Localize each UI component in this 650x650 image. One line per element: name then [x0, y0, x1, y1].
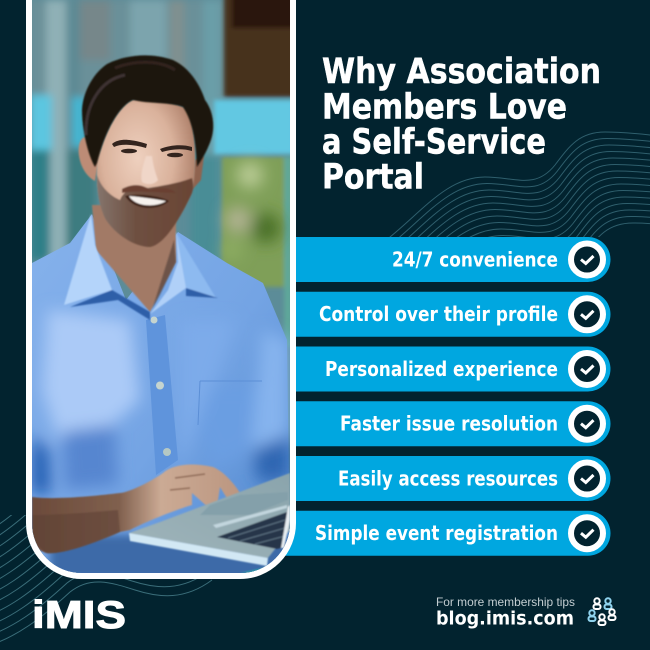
shirt placket and pocket: [146, 315, 178, 475]
benefit bar: simple event registration: Simple event registration: [315, 521, 558, 545]
benefit bar: personalized experience: [296, 346, 610, 392]
benefit bar: simple event registration: [270, 511, 610, 556]
beard: [97, 175, 193, 247]
man: forearm and hand: [32, 465, 240, 553]
man: hair: [82, 55, 213, 167]
footer call to action: [436, 595, 575, 630]
benefit bar: control over their profile: Control over their profile: [319, 302, 558, 326]
benefit bar: faster issue resolution: Faster issue resolution: [340, 412, 558, 436]
decorative wave lines: top right: [390, 132, 650, 237]
title: a Self-Service: [322, 122, 546, 162]
man: face: [97, 99, 195, 247]
photo: smiling man with laptop in white rounded frame: [29, 0, 299, 580]
benefit bar: easily access resources: [296, 456, 610, 501]
decorative wave lines: bottom left: [0, 515, 212, 642]
title: Why Association: [322, 52, 601, 92]
man: shirt: [32, 214, 290, 580]
man: ears: [79, 137, 204, 190]
man: shirt collar: [64, 214, 218, 320]
footer url: blog.imis.com: [436, 608, 574, 630]
footer tagline: For more membership tips: [436, 595, 575, 609]
title: Members Love: [322, 88, 567, 128]
logo: iMIS: iMIS: [32, 594, 126, 637]
icon: group of people: [588, 598, 616, 625]
benefit bar: control over their profile: [296, 292, 610, 337]
benefit bar: faster issue resolution: [296, 401, 610, 446]
benefit bar: personalized experience: Personalized experience: [325, 357, 558, 381]
benefit bar: easily access resources: Easily access resources: [338, 466, 558, 490]
laptop: [129, 473, 290, 573]
man: neck: [92, 205, 176, 312]
benefit bar: 24/7 convenience: [296, 237, 610, 282]
panel: benefit list: [270, 237, 610, 556]
man: eyes and brows: [112, 140, 192, 157]
benefit bar: 24/7 convenience: 24/7 convenience: [392, 248, 558, 272]
title: Portal: [322, 158, 424, 198]
